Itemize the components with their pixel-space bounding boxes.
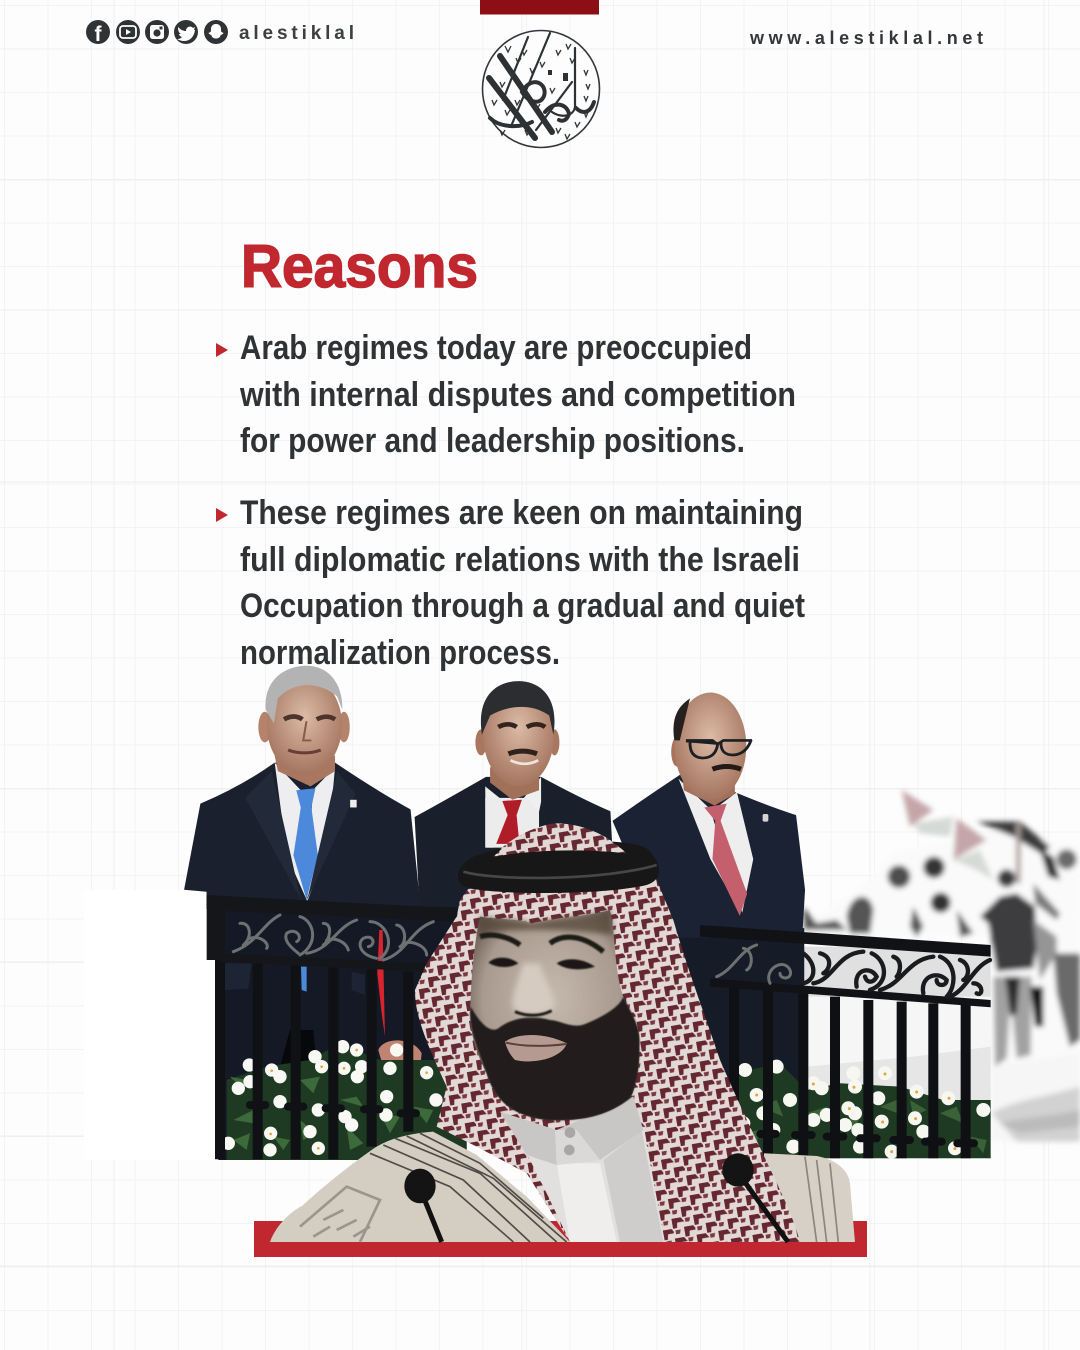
foliage [227, 1043, 467, 1160]
text block: reason one: for power and leadership positions. [240, 422, 745, 460]
face [470, 910, 639, 1120]
hand [378, 1040, 422, 1080]
social handle: alestiklal [239, 23, 354, 44]
icon: twitter [174, 20, 198, 44]
beard [470, 997, 639, 1120]
icon: instagram [145, 20, 169, 44]
suits behind railing [218, 907, 467, 1160]
jacket and legs of right official [670, 928, 804, 1089]
website url: www.alestiklal.net [749, 28, 983, 48]
rail scrolls dark backdrop [717, 945, 791, 983]
photo: distant protest crowd [793, 790, 1080, 1158]
photo: officials at the railing [184, 666, 805, 1089]
nose [512, 963, 555, 1015]
text block: reason two: These regimes are keen on maintaining [240, 494, 803, 532]
rail scrolls light backdrop [803, 952, 990, 997]
bullet arrow [216, 508, 228, 522]
left railing with flowers [207, 895, 467, 1160]
left bisht [270, 1132, 570, 1242]
rail scrolls [233, 915, 433, 960]
verticals [734, 987, 966, 1158]
logo: calligraphic seal [482, 30, 600, 148]
text block: reason two: full diplomatic relations with the Israeli [240, 541, 800, 579]
left microphone [404, 1169, 442, 1242]
right bisht [764, 1153, 855, 1242]
text block: reason two: Occupation through a gradual and quiet [240, 587, 805, 625]
text block: reason one: Arab regimes today are preoccupied [240, 329, 752, 367]
crown of keffiyeh [493, 823, 627, 857]
forehead shadow [477, 910, 613, 935]
icon: snapchat [204, 20, 228, 44]
person: left official [184, 666, 421, 909]
icon: facebook: f [94, 23, 102, 46]
top red tab [480, 0, 599, 14]
photo: central figure in keffiyeh [270, 823, 855, 1242]
collar [500, 1097, 643, 1165]
rail bars [207, 895, 457, 972]
white backing panel [84, 890, 218, 1160]
person: centre official [415, 681, 617, 928]
bullet arrow [216, 343, 228, 357]
icon: youtube [116, 20, 140, 44]
mouth [505, 1035, 567, 1061]
heading: Reasons [241, 233, 478, 300]
keffiyeh [415, 823, 800, 1242]
text block: reason two: normalization process. [240, 634, 560, 672]
bottom red frame [254, 1221, 867, 1257]
text block: reason two [216, 494, 805, 672]
backdrop: white wall behind railing [793, 947, 991, 1158]
verticals [220, 960, 408, 1159]
thobe [527, 1127, 665, 1242]
text block: reason one: with internal disputes and competition [239, 376, 796, 414]
foliage right [733, 1063, 991, 1158]
right microphone [722, 1153, 788, 1242]
rail bars [700, 925, 991, 1007]
icon: facebook [86, 20, 110, 46]
person: right official [612, 693, 805, 938]
social media icons [86, 20, 228, 46]
right railing with flowers [700, 925, 991, 1158]
igal headband [458, 841, 659, 893]
text block: reason one [216, 329, 796, 460]
brows [480, 935, 603, 952]
eyes [488, 958, 595, 969]
